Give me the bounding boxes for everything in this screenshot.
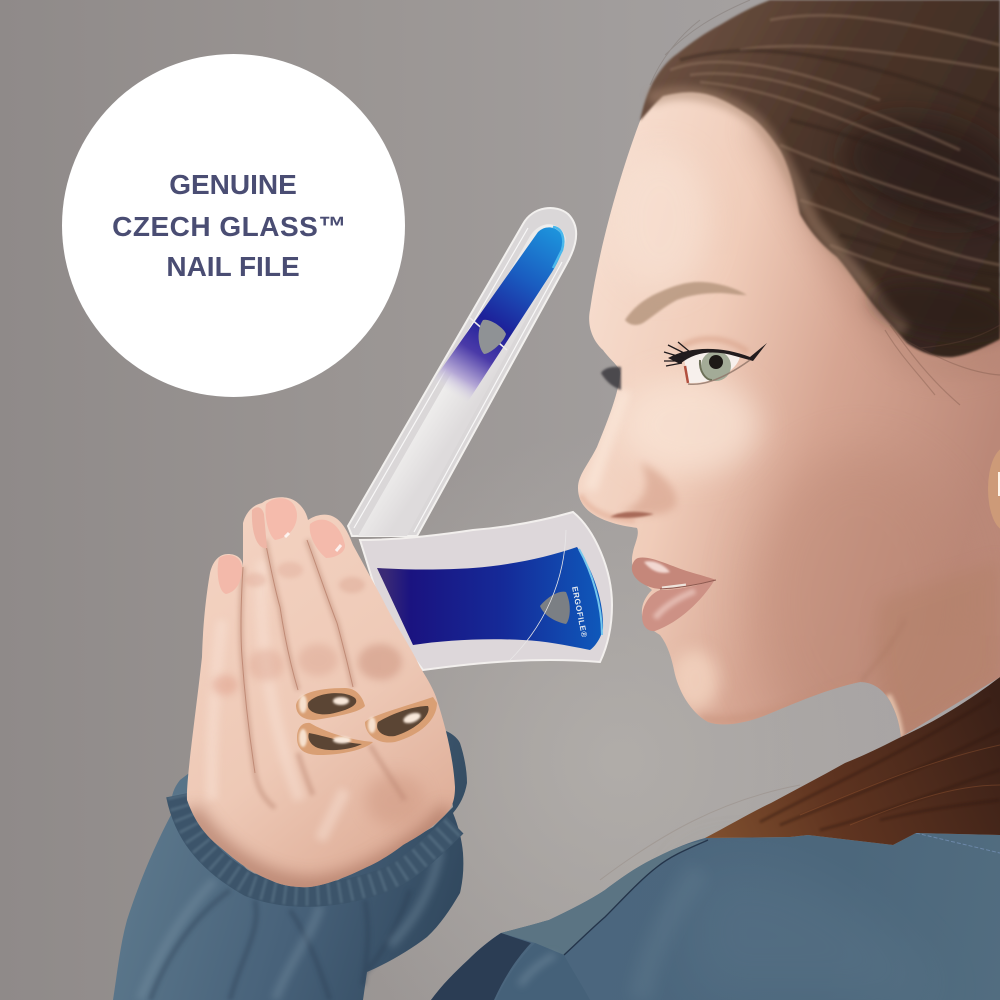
upper lip	[632, 557, 716, 589]
glass body	[358, 224, 566, 536]
fold shadows	[150, 890, 410, 1000]
wrist shadow	[190, 810, 450, 887]
case	[360, 512, 612, 670]
ring: top	[296, 688, 365, 720]
cheek highlight	[620, 375, 760, 475]
light strands	[670, 15, 1000, 290]
dark core	[830, 98, 1000, 242]
gathered elastic band	[178, 795, 455, 895]
hand	[187, 497, 455, 887]
teeth	[662, 585, 686, 588]
heading: CZECH GLASS™	[112, 211, 347, 242]
collar flap	[501, 840, 708, 955]
nail file: lower	[360, 512, 612, 670]
neck shade	[884, 580, 988, 716]
jaw lower shade	[700, 711, 773, 724]
film edge	[510, 530, 566, 660]
sleeve edge	[470, 318, 507, 350]
dark under-panel	[431, 933, 531, 1000]
logo badge	[540, 592, 570, 624]
nose wing shade	[622, 462, 677, 515]
heading	[112, 169, 347, 282]
lower lip	[642, 581, 714, 631]
white badge circle	[62, 54, 405, 397]
nose tip shade	[580, 495, 635, 520]
far-eye lashes	[601, 367, 621, 390]
nose ridge highlight	[590, 390, 625, 490]
blue file	[377, 547, 603, 650]
knuckle creases	[212, 675, 238, 695]
flyaway hairs	[650, 0, 750, 85]
neck rim light	[888, 695, 901, 737]
blouse	[431, 833, 1000, 1000]
eyebrow	[625, 282, 747, 325]
cheek shadow	[746, 464, 894, 697]
face shading	[580, 120, 1000, 750]
forehead highlight	[641, 173, 704, 276]
lips	[632, 557, 716, 631]
ring: bottom	[297, 723, 373, 755]
chin highlight	[671, 650, 719, 710]
lashes	[664, 342, 690, 366]
sleeve cuff	[113, 730, 467, 1000]
nostril	[610, 512, 654, 518]
finger separations	[241, 540, 405, 808]
hand shading	[190, 540, 450, 887]
heading: GENUINE	[169, 169, 297, 200]
brand text: ERGOFILE®	[570, 586, 589, 639]
logo badge	[479, 320, 506, 354]
fold highlights	[140, 850, 440, 1000]
finger highlights	[212, 560, 345, 840]
case inner edge	[354, 228, 562, 532]
hair	[640, 0, 1000, 405]
case	[348, 208, 576, 536]
shoulder panel	[496, 943, 590, 1000]
nails	[218, 555, 242, 594]
temple shade under hair	[748, 128, 936, 365]
fabric sheen	[685, 864, 940, 1000]
eyelid	[678, 339, 748, 352]
nail file: upper	[348, 208, 576, 536]
earring	[988, 447, 1000, 531]
lower lid	[688, 360, 750, 384]
hairline lightening	[650, 93, 905, 330]
eye	[664, 339, 767, 384]
sclera	[684, 350, 740, 383]
heading: NAIL FILE	[166, 251, 300, 282]
ponytail	[600, 677, 1000, 880]
palm shadow	[365, 774, 425, 826]
ring: right	[365, 697, 437, 743]
pupil	[709, 355, 723, 369]
coloured gradient	[418, 227, 564, 426]
iris	[701, 351, 731, 381]
wisps below hairline	[885, 325, 1000, 405]
face and neck	[570, 50, 1000, 750]
seam	[564, 840, 708, 955]
rings	[296, 688, 437, 755]
upper lash line	[668, 343, 767, 364]
